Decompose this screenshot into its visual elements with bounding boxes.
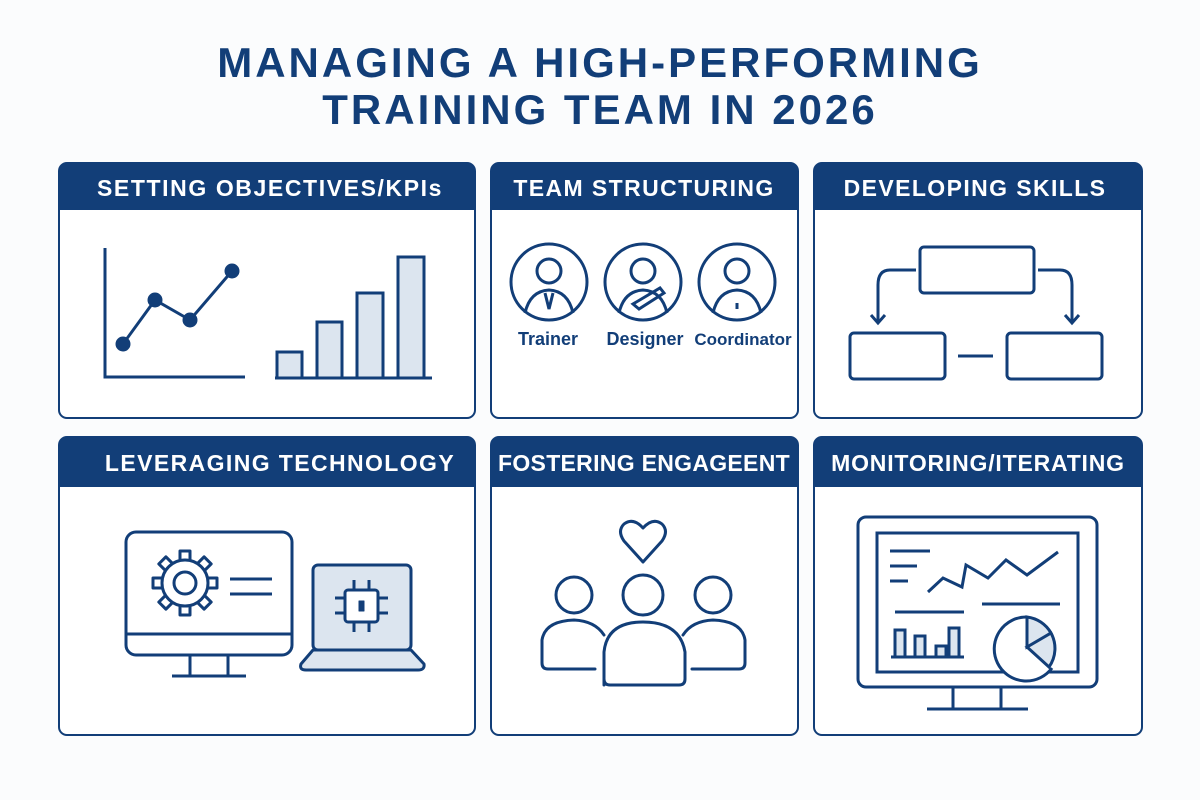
heading: developing skills: DEVELOPING SKILLS bbox=[844, 175, 1106, 201]
title: MANAGING A HIGH-PERFORMING bbox=[217, 39, 983, 86]
panel: team structuring bbox=[491, 163, 798, 418]
panel: fostering engagement bbox=[491, 437, 798, 735]
diagram: flow boxes bbox=[850, 247, 1102, 379]
labels: roles bbox=[518, 329, 792, 349]
heading: team structuring: TEAM STRUCTURING bbox=[513, 175, 775, 201]
chart: line chart bbox=[105, 248, 245, 377]
labels: roles: Designer bbox=[606, 329, 684, 349]
panel: leveraging technology bbox=[59, 437, 475, 735]
panel: developing skills bbox=[814, 163, 1142, 418]
labels: roles: Coordinator bbox=[694, 330, 792, 349]
icon: team of people bbox=[542, 575, 745, 685]
heading: setting objectives: SETTING OBJECTIVES/KPIs bbox=[97, 175, 443, 201]
icon: desktop with gear bbox=[126, 532, 292, 676]
title: TRAINING TEAM IN 2026 bbox=[322, 86, 878, 133]
heading: leveraging technology: LEVERAGING TECHNOLOGY bbox=[105, 450, 455, 476]
icon: coordinator bbox=[699, 244, 775, 320]
icon: dashboard monitor bbox=[858, 517, 1097, 709]
labels: roles: Trainer bbox=[518, 329, 578, 349]
heading: fostering engagement: FOSTERING ENGAGEENT bbox=[498, 450, 790, 476]
icon: trainer bbox=[511, 244, 587, 320]
icon: designer bbox=[605, 244, 681, 320]
icon: laptop with chip bbox=[301, 565, 424, 670]
panel: setting objectives bbox=[59, 163, 475, 418]
icon: heart bbox=[620, 521, 666, 562]
title bbox=[217, 39, 983, 133]
panel: monitoring iterating bbox=[814, 437, 1142, 735]
heading: monitoring iterating: MONITORING/ITERATING bbox=[831, 450, 1125, 476]
chart: bar chart bbox=[275, 257, 432, 378]
